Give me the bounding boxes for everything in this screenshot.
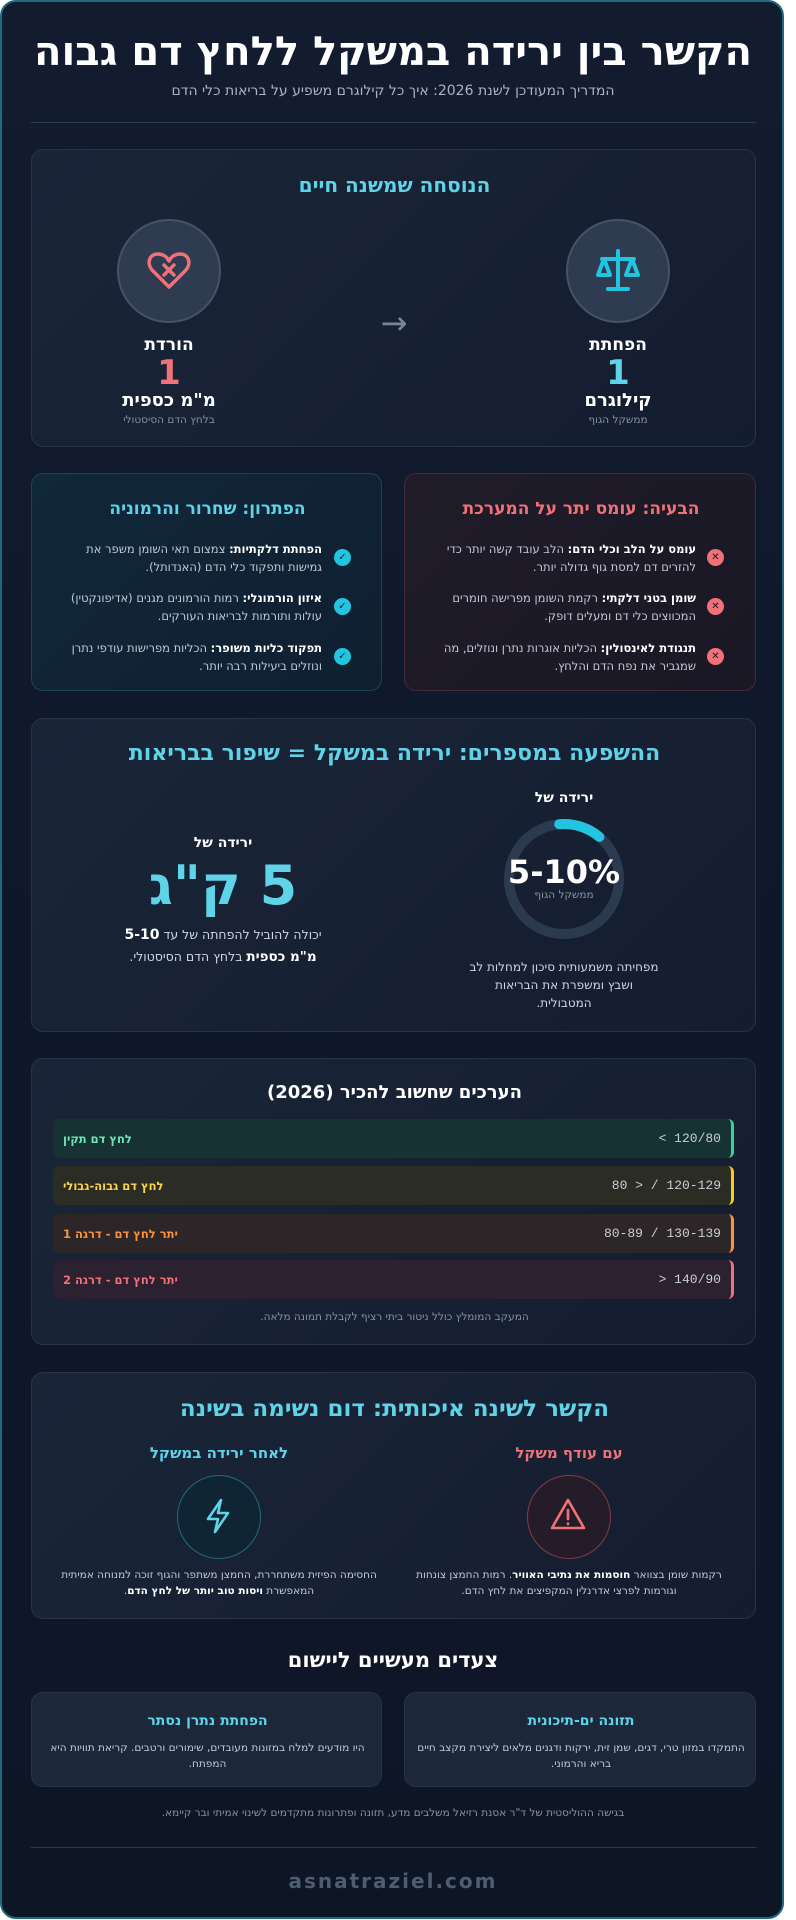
solution item 3: ✓ (338, 651, 347, 662)
stat: 5 kg (124, 835, 322, 965)
stat: 1 mmHg: הורדת (144, 335, 194, 355)
stat: 1 mmHg: 1 (157, 353, 181, 393)
title: הקשר בין ירידה במשקל ללחץ דם גבוה (34, 29, 752, 75)
ring chart: 5-10%: ירידה של (535, 790, 593, 806)
panel: formula (31, 149, 756, 447)
problem heading: הבעיה: עומס יתר על המערכת (463, 499, 699, 519)
sleep heading: הקשר לשינה איכותית: דום נשימה בשינה (180, 1396, 609, 1422)
card: hidden sodium: הפחתת נתרן נסתר (147, 1713, 268, 1729)
row: stage 2: יתר לחץ דם - דרגה 2 (63, 1272, 178, 1286)
row: stage 1: 80-89 / 130-139 (604, 1226, 721, 1241)
practical steps heading: צעדים מעשיים ליישום (288, 1648, 498, 1672)
stat: 1 kg: הפחתת (589, 335, 647, 355)
panel: solution (31, 473, 382, 691)
problem item 3: ✕ (711, 651, 720, 662)
stat: 5 kg: יכולה להוביל להפחתה של עד 5-10 (124, 927, 322, 943)
solution item 1: ✓ (338, 552, 347, 563)
problem item 2: ✕ (711, 601, 720, 612)
icon: heart (117, 219, 221, 323)
stat: 1 kg: קילוגרם (584, 390, 652, 411)
panel: BP table (31, 1058, 756, 1345)
row: normal: < 120/80 (659, 1131, 721, 1146)
row: stage 2 (53, 1260, 734, 1299)
card: mediterranean diet: התמקדו במזון טרי, דגים, שמן זית, ירקות ודגנים מלאים ליצירת מקצב חיים בריא והרמוני. (417, 1742, 745, 1770)
icon: scales (566, 219, 670, 323)
column: after weight loss: לאחר ירידה במשקל (150, 1444, 288, 1462)
stat: 5 kg: מ"מ כספית בלחץ הדם הסיסטולי. (129, 949, 317, 965)
problem item 2: שומן בטני דלקתי: רקמת השומן מפרישה חומרים המכווצים כלי דם ומעלים דופק. (452, 591, 696, 623)
problem item 1: עומס על הלב וכלי הדם: הלב עובד קשה יותר כדי להזרים דם למסת גוף גדולה יותר. (447, 542, 696, 574)
ring chart: 5-10% (469, 790, 659, 1010)
panel: problem (404, 473, 756, 691)
row: normal: לחץ דם תקין (63, 1132, 132, 1146)
column: with overweight (416, 1444, 722, 1597)
row: normal (53, 1119, 734, 1158)
numbers heading: ההשפעה במספרים: ירידה במשקל = שיפור בבריאות (129, 741, 660, 766)
ring chart: 5-10%: המטבולית. (536, 996, 592, 1010)
column: after weight loss (61, 1444, 377, 1597)
stat: 5 kg: 5 ק"ג (149, 854, 297, 917)
column: with overweight: רקמות שומן בצוואר חוסמות את נתיבי האוויר. רמות החמצן צונחות וגורמות לפרצי אדרנלין המקפיצים את לחץ הדם. (416, 1569, 722, 1597)
stat: 1 mmHg: מ"מ כספית (122, 390, 216, 411)
ring chart: 5-10%: מפחיתה משמעותית סיכון למחלות לב (469, 960, 659, 974)
solution item 3: תפקוד כליות משופר: הכליות מפרישות עודפי נתרן ונוזלים ביעילות רבה יותר. (72, 641, 322, 673)
card: mediterranean diet: תזונה ים-תיכונית (528, 1713, 634, 1729)
stat: 1 mmHg: בלחץ הדם הסיסטולי (123, 414, 215, 426)
row: elevated: 80 > / 120-129 (612, 1178, 721, 1193)
subtitle: המדריך המעודכן לשנת 2026: איך כל קילוגרם משפיע על בריאות כלי הדם (172, 83, 614, 99)
row: elevated (53, 1166, 734, 1205)
row: stage 1: יתר לחץ דם - דרגה 1 (63, 1226, 178, 1240)
icon: lightning (177, 1475, 261, 1559)
card: hidden sodium (31, 1692, 382, 1787)
row: stage 2: > 140/90 (659, 1272, 721, 1287)
card: hidden sodium: היו מודעים למלח במזונות מעובדים, שימורים ורטבים. קריאת תוויות היא המפתח. (50, 1742, 365, 1770)
table heading: הערכים שחשוב להכיר (2026) (267, 1082, 522, 1103)
website url: asnatraziel.com (288, 1869, 498, 1893)
stat: 1 kg: 1 (606, 353, 630, 393)
stat: 1 mmHg (122, 335, 216, 426)
stat: 1 kg (584, 335, 652, 426)
problem item 1: ✕ (711, 552, 720, 563)
ring chart: 5-10%: ממשקל הגוף (534, 889, 594, 901)
formula heading: הנוסחה שמשנה חיים (299, 173, 490, 197)
problem item 3: תנגודת לאינסולין: הכליות אוגרות נתרן ונוזלים, מה שמגביר את נפח הדם והלחץ. (444, 641, 696, 673)
footer text: בגישה ההוליסטית של ד"ר אסנת רזיאל משלבים מדע, תזונה ופתרונות מתקדמים לשינוי אמיתי ובר קיימא. (162, 1807, 624, 1819)
arrow: → (381, 304, 407, 342)
panel: numbers (31, 718, 756, 1032)
table note: המעקב המומלץ כולל ניטור ביתי רציף לקבלת תמונה מלאה. (260, 1311, 529, 1323)
stat: 1 kg: ממשקל הגוף (588, 414, 648, 426)
ring chart: 5-10%: ושבץ ומשפרת את הבריאות (495, 978, 633, 992)
ring chart: 5-10%: 5-10% (508, 853, 620, 891)
solution item 2: איזון הורמונלי: רמות הורמונים מגנים (אדיפונקטין) עולות ותורמות לבריאות העורקים. (71, 591, 322, 623)
icon: warning (527, 1475, 611, 1559)
row: elevated: לחץ דם גבוה-גבולי (63, 1178, 163, 1192)
column: with overweight: עם עודף משקל (515, 1444, 623, 1462)
stat: 5 kg: ירידה של (194, 835, 252, 851)
row: stage 1 (53, 1214, 734, 1253)
panel: sleep apnea (31, 1372, 756, 1619)
solution heading: הפתרון: שחרור והרמוניה (109, 499, 306, 519)
solution item 1: הפחתת דלקתיות: צמצום תאי השומן משפר את גמישות ותפקוד כלי הדם (האנדותל). (86, 542, 322, 574)
solution item 2: ✓ (338, 601, 347, 612)
column: after weight loss: החסימה הפיזית משתחררת, החמצן משתפר והגוף זוכה למנוחה אמיתית המאפשרת ויסות טוב יותר של לחץ הדם. (61, 1569, 377, 1597)
card: mediterranean diet (404, 1692, 756, 1787)
